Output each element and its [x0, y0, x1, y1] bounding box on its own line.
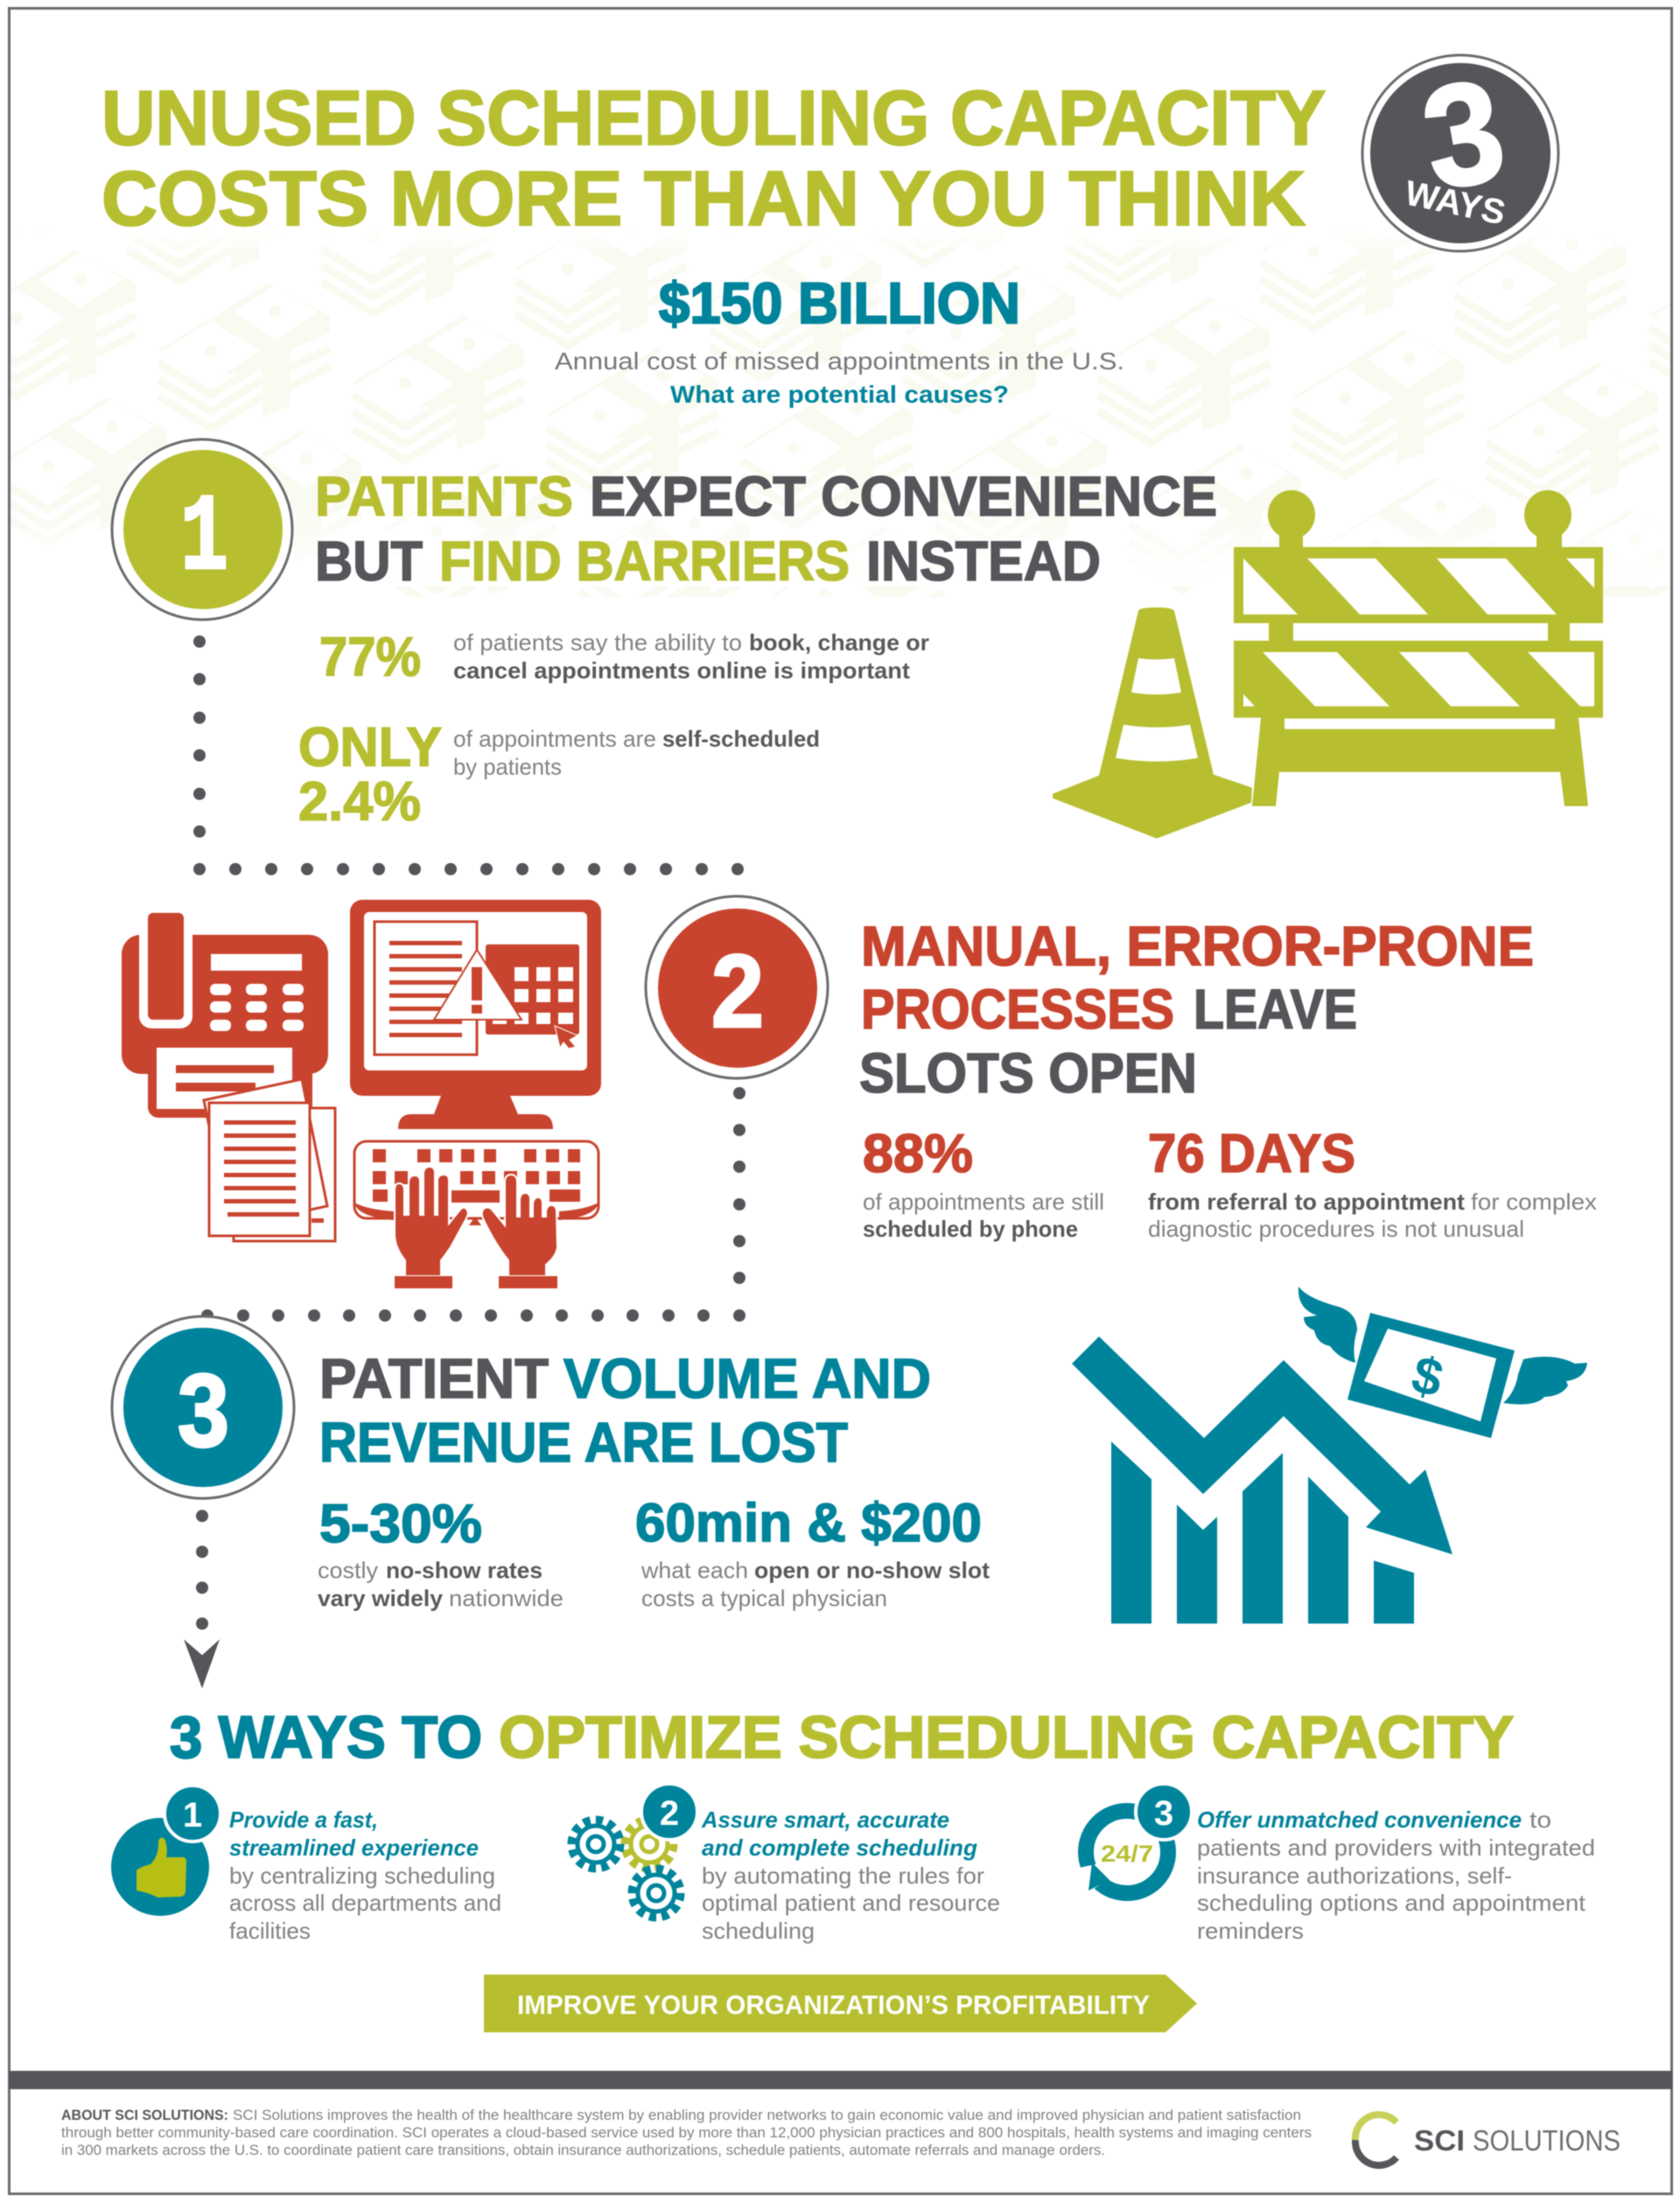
stat: 88%: [863, 1124, 1104, 1242]
solution 2: smart accurate scheduling: [572, 1784, 1000, 1944]
footer divider bar: [9, 2071, 1672, 2089]
callout arrow: improve profitability: IMPROVE YOUR ORGANIZATION’S PROFITABILITY: [517, 1989, 1150, 2020]
heading 3: PATIENT: [319, 1347, 549, 1410]
footer: about text: in 300 markets across the U.S. to coordinate patient care transitions, obtain insurance authorizations, schedule patients, automate referrals and manage orders.: [61, 2142, 1105, 2158]
solution 1: fast streamlined experience: [111, 1786, 501, 1944]
icon: computer monitor with warning: [350, 900, 601, 1129]
icon: 24/7 cycle: [1074, 1784, 1192, 1895]
icon: road barricade: [1234, 490, 1603, 806]
stat: 76 days: for complex: [1471, 1189, 1597, 1215]
icon: falling chart with flying money: $: [1406, 1344, 1449, 1408]
heading 1: EXPECT CONVENIENCE: [590, 465, 1217, 528]
number badge 3: 3: [178, 1353, 229, 1469]
icon: traffic cone: [1053, 607, 1252, 838]
headline figure: $150 billion: Annual cost of missed appointments in the U.S.: [555, 347, 1124, 375]
text: solution 2: scheduling: [702, 1918, 815, 1944]
stat: 76 days: diagnostic procedures is not unusual: [1148, 1216, 1524, 1242]
headline figure: $150 billion: $150 BILLION: [659, 270, 1020, 335]
connector: dotted line section 2 to 3: [201, 1087, 746, 1322]
stat: 60min and $200: open or no-show slot: [754, 1557, 990, 1583]
stat: 5-30%: no-show rates: [386, 1557, 542, 1583]
solution 3: unmatched convenience: [1074, 1784, 1595, 1944]
stat: 5-30%: costly: [318, 1557, 378, 1583]
heading 1: BUT: [315, 530, 423, 593]
text: solution 3: to: [1530, 1807, 1551, 1833]
text: solution 1: across all departments and: [229, 1890, 501, 1916]
footer: about text: ABOUT SCI SOLUTIONS:: [61, 2107, 228, 2123]
text: solution 2: optimal patient and resource: [702, 1890, 1000, 1916]
text: solution 1: [229, 1807, 501, 1944]
stat: 60min and $200: 60min & $200: [635, 1493, 982, 1554]
heading 3: VOLUME AND: [564, 1347, 931, 1410]
text: solution 1: Provide a fast,: [229, 1807, 378, 1833]
icon: gears: [572, 1784, 697, 1917]
logo: SCI Solutions: SOLUTIONS: [1473, 2124, 1620, 2157]
logo: SCI Solutions: [1355, 2115, 1620, 2165]
icon: fax machine and papers: [122, 913, 335, 1241]
text: solution 3: insurance authorizations, self-: [1197, 1863, 1512, 1889]
title: [102, 74, 1326, 242]
badge: 3 ways: WAYS: [1402, 174, 1508, 233]
icon: gears: 2: [660, 1794, 679, 1833]
icon: 24/7 cycle: 24/7: [1101, 1841, 1153, 1867]
badge: 3 ways: [1362, 48, 1558, 251]
text: solution 1: facilities: [229, 1918, 311, 1944]
stat: only 2.4%: ONLY: [298, 717, 442, 778]
connector: dotted line section 1 to 2: [193, 635, 744, 875]
badge: 3 ways: 3: [1411, 48, 1516, 221]
text: solution 2: Assure smart, accurate: [701, 1807, 949, 1833]
panel: cause 1, patients find barriers: [112, 439, 1603, 838]
text: solution 3: scheduling options and appointment: [1197, 1890, 1586, 1916]
stat: 77%: 77%: [319, 627, 421, 688]
text: solution 3: patients and providers with integrated: [1197, 1835, 1595, 1861]
footer: about text: SCI Solutions improves the health of the healthcare system by enabling provider networks to gain economic value and improved physician and patient satisfaction: [233, 2107, 1301, 2123]
footer: about text: [61, 2107, 1312, 2158]
heading 2: MANUAL, ERROR-PRONE: [861, 915, 1534, 978]
title: COSTS MORE THAN YOU THINK: [102, 155, 1306, 242]
stat: 60min and $200: [635, 1493, 990, 1611]
connector: dotted arrow to solutions: [184, 1510, 220, 1688]
heading 2: LEAVE: [1194, 978, 1357, 1041]
number badge 2: 2: [711, 934, 764, 1049]
heading 2: PROCESSES: [861, 978, 1174, 1041]
section heading: 3 ways to optimize: 3 WAYS TO: [170, 1704, 482, 1771]
headline figure: $150 billion: [555, 270, 1124, 408]
stat: 5-30%: vary widely: [318, 1585, 444, 1611]
text: solution 1: streamlined experience: [229, 1835, 479, 1861]
icon: 24/7 cycle: 3: [1154, 1794, 1173, 1833]
stat: only 2.4%: 2.4%: [298, 771, 421, 832]
stat: 88%: 88%: [863, 1124, 973, 1184]
background pattern: stacks of money: [0, 86, 1680, 672]
stat: 5-30%: 5-30%: [319, 1494, 482, 1554]
icon: falling chart with flying money: [1072, 1287, 1587, 1624]
stat: 76 days: from referral to appointment: [1148, 1189, 1465, 1215]
heading 3: REVENUE ARE LOST: [319, 1411, 848, 1474]
icon: thumbs up: [111, 1786, 220, 1916]
heading 2: [859, 915, 1534, 1105]
stat: 77%: [319, 627, 929, 688]
title: UNUSED SCHEDULING CAPACITY: [102, 74, 1326, 161]
stat: 60min and $200: costs a typical physician: [641, 1585, 887, 1611]
stat: 5-30%: nationwide: [449, 1585, 564, 1611]
heading 1: [315, 465, 1217, 593]
stat: 60min and $200: what each: [640, 1557, 748, 1583]
stat: 76 days: [1148, 1124, 1597, 1242]
icon: thumbs up: 1: [183, 1796, 202, 1835]
number badge 2: [646, 896, 828, 1078]
heading 3: [319, 1347, 931, 1474]
text: solution 1: by centralizing scheduling: [229, 1863, 495, 1889]
stat: 77%: book, change or: [749, 629, 929, 656]
text: solution 3: reminders: [1197, 1918, 1304, 1944]
heading 2: SLOTS OPEN: [859, 1042, 1197, 1105]
stat: 88%: of appointments are still: [863, 1189, 1104, 1215]
heading 1: FIND BARRIERS: [439, 530, 850, 593]
number badge 1: [112, 439, 292, 620]
stat: only 2.4%: [298, 717, 820, 832]
heading 1: INSTEAD: [866, 530, 1101, 593]
stat: 76 days: 76 DAYS: [1148, 1124, 1355, 1184]
stat: 88%: scheduled by phone: [863, 1216, 1078, 1242]
panel: cause 2, manual processes: [122, 896, 1597, 1288]
footer: about text: through better community-based care coordination. SCI operates a cloud-based service used by more than 12,000 physician practices and 800 hospitals, health systems and imaging centers: [61, 2124, 1312, 2141]
heading 1: PATIENTS: [315, 465, 573, 528]
stat: 77%: of patients say the ability to: [453, 629, 742, 656]
callout arrow: improve profitability: [484, 1975, 1197, 2032]
stat: 77%: cancel appointments online is important: [453, 657, 910, 684]
number badge 1: 1: [180, 479, 228, 601]
logo: SCI Solutions: SCI: [1414, 2124, 1465, 2157]
headline figure: $150 billion: What are potential causes?: [670, 381, 1009, 408]
icon: keyboard and hands: [354, 1141, 598, 1288]
stat: 5-30%: [318, 1494, 564, 1611]
text: solution 2: by automating the rules for: [702, 1863, 984, 1889]
text: solution 3: [1197, 1807, 1595, 1944]
text: solution 3: Offer unmatched convenience: [1197, 1807, 1522, 1833]
panel: cause 3, volume and revenue lost: [112, 1287, 1587, 1624]
stat: only 2.4%: of appointments are: [453, 726, 656, 752]
number badge 3: [112, 1316, 294, 1498]
text: solution 2: [701, 1807, 1000, 1944]
section heading: 3 ways to optimize: OPTIMIZE SCHEDULING CAPACITY: [499, 1704, 1514, 1771]
text: solution 2: and complete scheduling: [702, 1835, 977, 1861]
stat: only 2.4%: self-scheduled: [662, 726, 820, 752]
stat: only 2.4%: by patients: [453, 754, 562, 780]
